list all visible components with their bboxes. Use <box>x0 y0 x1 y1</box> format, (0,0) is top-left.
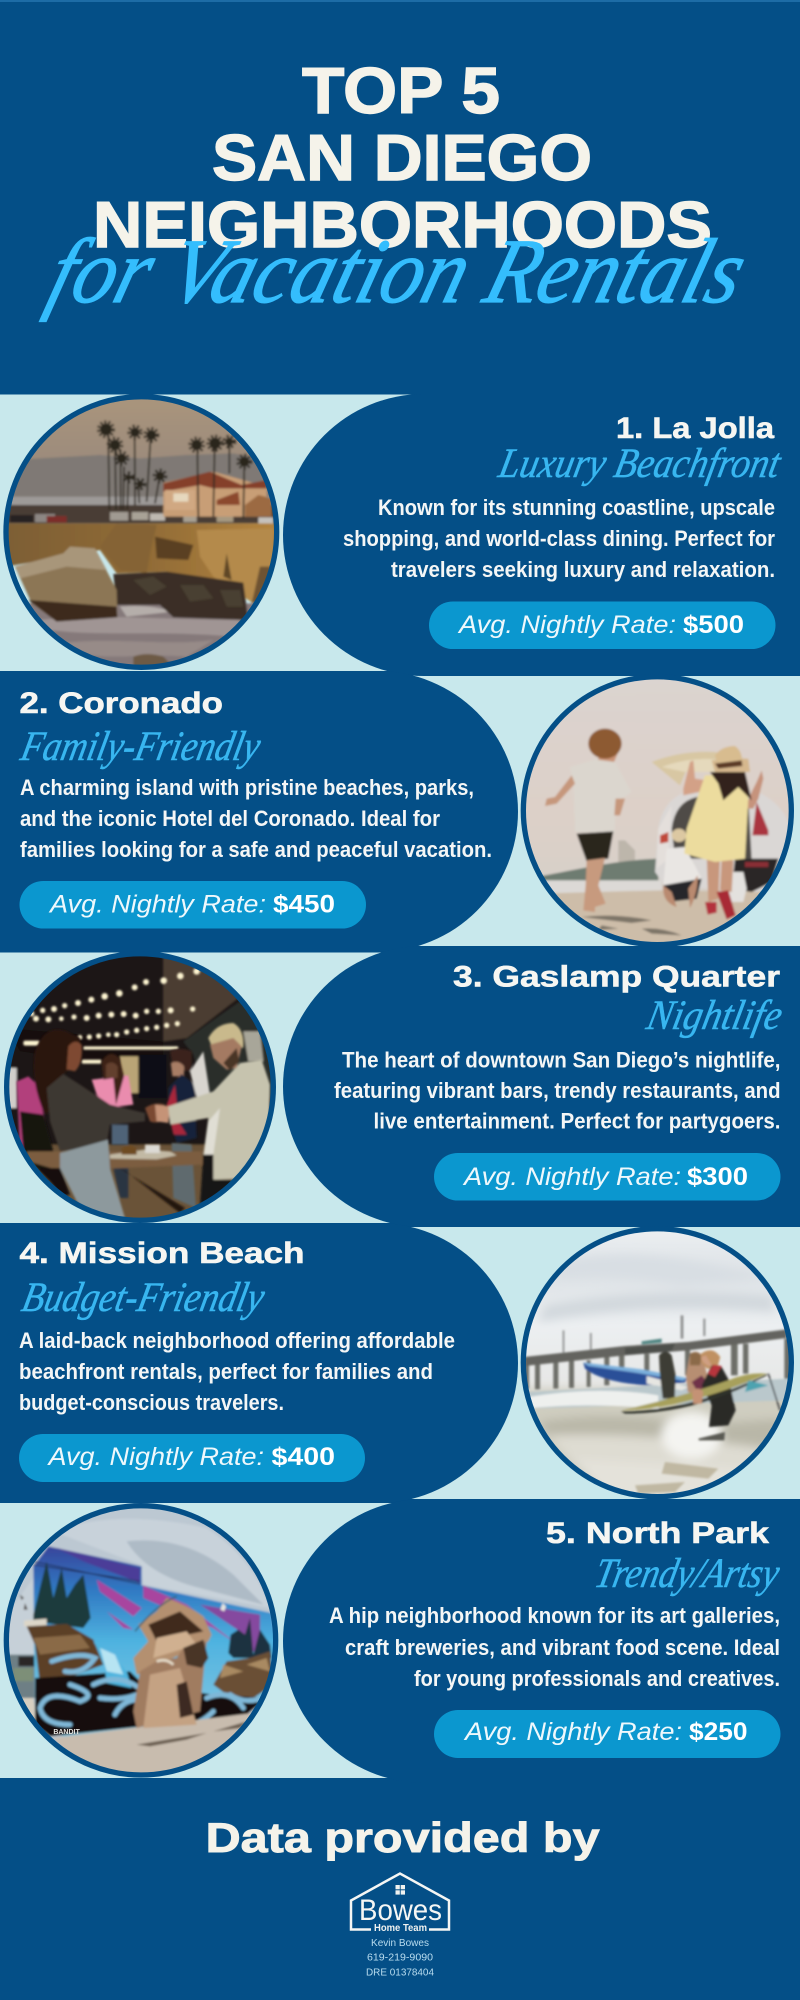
rate badge: $250 <box>434 1710 780 1758</box>
photo: La Jolla coastline <box>0 390 285 675</box>
heading: Gaslamp Quarter: 3. Gaslamp Quarter <box>453 960 780 994</box>
description: Mission Beach: beachfront rentals, perfect for families and <box>19 1359 433 1384</box>
description: Gaslamp Quarter: The heart of downtown San Diego’s nightlife, <box>342 1048 780 1072</box>
description: La Jolla: travelers seeking luxury and relaxation. <box>391 557 775 582</box>
rate badge: $300 <box>434 1153 780 1200</box>
heading: Coronado: 2. Coronado <box>20 687 223 720</box>
panel: 1 La Jolla <box>283 394 800 676</box>
heading: La Jolla: 1. La Jolla <box>616 412 774 445</box>
panel: 2 Coronado <box>0 671 518 952</box>
footer heading: Data provided by <box>206 1814 600 1861</box>
tagline: Budget-Friendly: Budget-Friendly <box>18 1274 269 1321</box>
rate badge: $450 <box>20 881 366 928</box>
rate badge: $250: $250 <box>689 1718 748 1746</box>
title: NEIGHBORHOODS <box>93 188 712 261</box>
logo: Bowes Home Team <box>351 1874 449 1934</box>
photo: Mission Beach surfers <box>515 1222 800 1507</box>
tagline: Family-Friendly: Family-Friendly <box>16 723 265 770</box>
description: Mission Beach: budget-conscious travelers. <box>19 1390 284 1415</box>
heading: Mission Beach: 4. Mission Beach <box>20 1237 304 1270</box>
description: La Jolla <box>343 495 775 582</box>
description: Coronado: A charming island with pristine beaches, parks, <box>20 775 474 800</box>
contact details: Kevin Bowes <box>371 1937 429 1949</box>
description: North Park <box>329 1603 780 1691</box>
description: Coronado <box>20 775 492 862</box>
rate badge: $500 <box>429 602 776 649</box>
rate badge: $400: Avg. Nightly Rate: <box>46 1443 264 1471</box>
panel: 3 Gaslamp Quarter <box>283 946 800 1227</box>
script subtitle: for Vacation Rentals <box>38 221 757 323</box>
logo: Bowes Home Team: Home Team <box>374 1922 427 1934</box>
title: SAN DIEGO <box>212 121 592 194</box>
description: Gaslamp Quarter <box>334 1048 780 1134</box>
description: Gaslamp Quarter: live entertainment. Perfect for partygoers. <box>374 1108 780 1134</box>
panel: 5 North Park <box>283 1499 800 1783</box>
panel: 4 Mission Beach <box>0 1223 518 1503</box>
rate badge: $500: $500 <box>683 611 744 639</box>
tagline: Nightlife: Nightlife <box>642 992 787 1039</box>
rate badge: $250: Avg. Nightly Rate: <box>463 1718 682 1746</box>
description: Mission Beach: A laid-back neighborhood offering affordable <box>19 1328 455 1353</box>
logo: Bowes Home Team: Bowes <box>359 1894 442 1927</box>
rate badge: $500: Avg. Nightly Rate: <box>457 611 676 639</box>
contact details <box>366 1937 434 1978</box>
description: Coronado: and the iconic Hotel del Coronado. Ideal for <box>20 806 440 831</box>
description: Coronado: families looking for a safe and peaceful vacation. <box>20 837 492 862</box>
photo: Gaslamp Quarter night party <box>0 948 285 1233</box>
light background bands <box>0 394 800 1778</box>
rate badge: $400 <box>19 1434 365 1482</box>
contact details: 619-219-9090 <box>367 1952 433 1964</box>
heading: North Park: 5. North Park <box>546 1517 769 1550</box>
photo: North Park mural: BANDIT <box>53 1729 80 1736</box>
rate badge: $450: Avg. Nightly Rate: <box>48 890 266 918</box>
description: Mission Beach <box>19 1328 455 1415</box>
title: TOP 5 <box>302 54 500 127</box>
rate badge: $400: $400 <box>272 1443 335 1471</box>
photo: North Park mural <box>0 1498 285 1783</box>
rate badge: $300: Avg. Nightly Rate: <box>462 1163 681 1191</box>
title <box>93 54 712 261</box>
contact details: DRE 01378404 <box>366 1966 434 1978</box>
photo: family on Coronado beach <box>515 672 800 952</box>
rate badge: $450: $450 <box>273 890 335 918</box>
rate badge: $300: $300 <box>687 1163 748 1191</box>
